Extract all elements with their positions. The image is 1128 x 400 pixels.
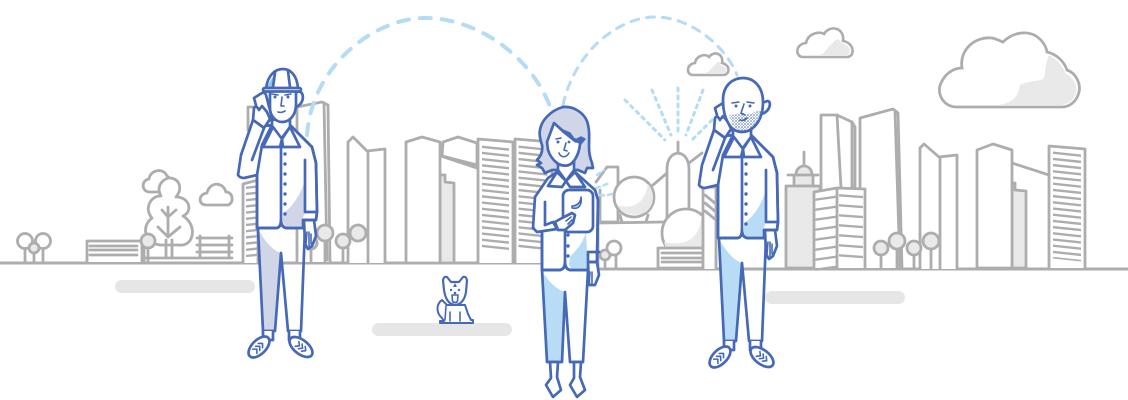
man head with beard [723, 78, 770, 132]
domes and tower complex [596, 142, 716, 269]
cloud: small upper right [797, 28, 853, 57]
cloud: small centre [688, 53, 728, 75]
left park: bench block [87, 241, 142, 262]
woman legs and shoes [542, 262, 599, 397]
signal arc: woman to man [563, 17, 737, 105]
signal arc: man to woman [307, 18, 552, 135]
figure: woman with tablet [533, 107, 599, 397]
striped tower behind woman [515, 139, 552, 263]
right: skyline towers [920, 144, 1085, 269]
woman hair [537, 107, 593, 173]
left trees near towers [305, 225, 358, 262]
ground line [0, 263, 1128, 269]
dog [438, 277, 473, 323]
figure: man with helmet [238, 69, 317, 361]
left trees in front of towers [336, 225, 366, 248]
left park: bench [145, 236, 232, 258]
left skyline towers [348, 137, 513, 263]
right: domed building [786, 152, 820, 268]
right: small trees [874, 233, 939, 268]
left park: small trees [18, 234, 50, 262]
left park: big tree [141, 178, 192, 262]
man head with hard hat [263, 69, 303, 122]
figure: bald man with beard [699, 78, 778, 371]
signal rays from tower [625, 88, 712, 140]
woman jacket [533, 160, 599, 270]
left park: clouds [143, 171, 232, 205]
woman face [547, 123, 585, 166]
right: striped block [814, 188, 865, 271]
right: tall towers [821, 109, 902, 268]
ground shadows [115, 280, 905, 336]
left buildings behind man [243, 102, 330, 263]
cloud: large right [939, 33, 1079, 107]
signal dashes near woman's tablet [596, 170, 612, 195]
